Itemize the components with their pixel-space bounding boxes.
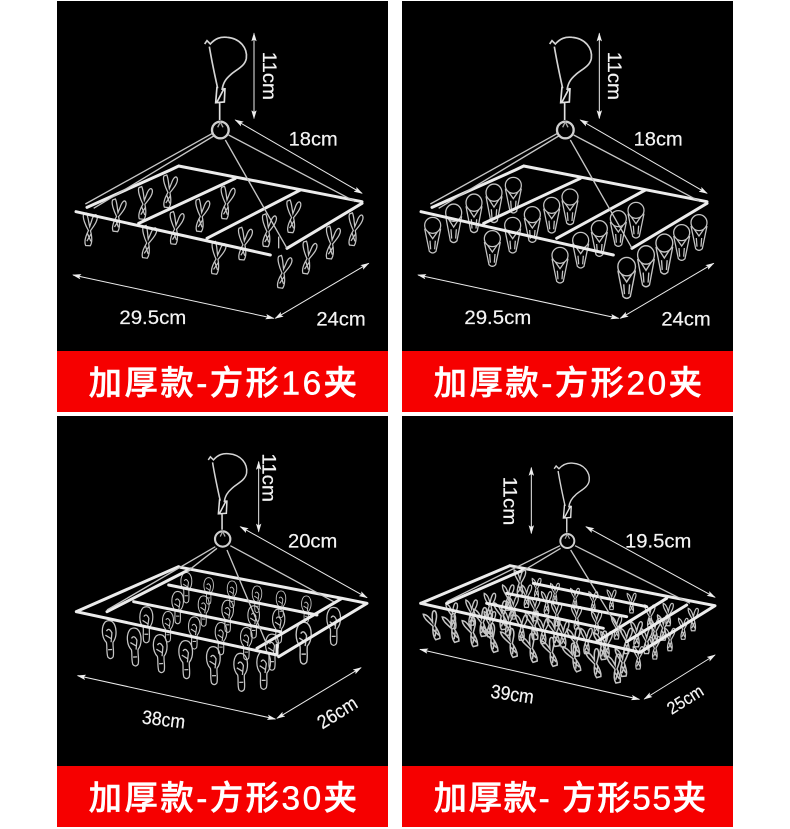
label: 25cm: 25cm <box>663 681 707 718</box>
label: 18cm: 18cm <box>289 130 338 151</box>
label: 29.5cm: 29.5cm <box>119 308 186 329</box>
label: 19.5cm: 19.5cm <box>625 532 691 553</box>
label: 26cm: 26cm <box>314 693 362 734</box>
panel: 55-clip hanger <box>402 416 733 827</box>
icon: hook and ring <box>550 37 591 138</box>
label: 38cm: 38cm <box>141 707 186 734</box>
icon: hook and ring <box>205 37 246 138</box>
icon: hook and ring <box>208 454 247 547</box>
clips: 20 round pegs <box>425 177 707 298</box>
label: 39cm: 39cm <box>489 682 535 709</box>
panel: 16-clip hanger <box>57 1 388 412</box>
label: 11cm: 11cm <box>257 453 278 502</box>
icon: hook and ring <box>554 463 589 548</box>
title banner <box>57 351 388 412</box>
hanger frame <box>421 546 715 652</box>
title banner: 加厚款- 方形55夹 <box>434 780 706 817</box>
panel: 20-clip hanger <box>402 1 733 412</box>
dimension arrows <box>73 33 369 318</box>
clips: 55 small pegs <box>423 570 698 684</box>
title banner <box>57 766 388 827</box>
hanger frame <box>76 133 362 255</box>
dimension arrows <box>420 468 715 699</box>
title banner <box>402 766 733 827</box>
label: 24cm: 24cm <box>316 310 366 331</box>
title banner <box>402 351 733 412</box>
dimension arrows <box>78 462 367 719</box>
clips: 30 rounded pegs <box>102 573 340 692</box>
title banner: 加厚款-方形30夹 <box>89 780 357 817</box>
label: 11cm: 11cm <box>603 52 624 100</box>
clips: 16 butterfly pegs <box>82 175 364 289</box>
title banner: 加厚款-方形20夹 <box>434 365 702 402</box>
label: 18cm: 18cm <box>634 130 683 151</box>
hanger frame <box>421 133 707 255</box>
dimension arrows <box>418 33 714 318</box>
panel: 30-clip hanger <box>57 416 388 827</box>
label: 29.5cm: 29.5cm <box>464 308 531 329</box>
label: 11cm: 11cm <box>258 52 279 100</box>
label: 24cm: 24cm <box>661 310 711 331</box>
label: 20cm: 20cm <box>288 532 337 553</box>
hanger frame <box>76 546 367 657</box>
title banner: 加厚款-方形16夹 <box>89 365 357 402</box>
label: 11cm: 11cm <box>499 477 520 525</box>
